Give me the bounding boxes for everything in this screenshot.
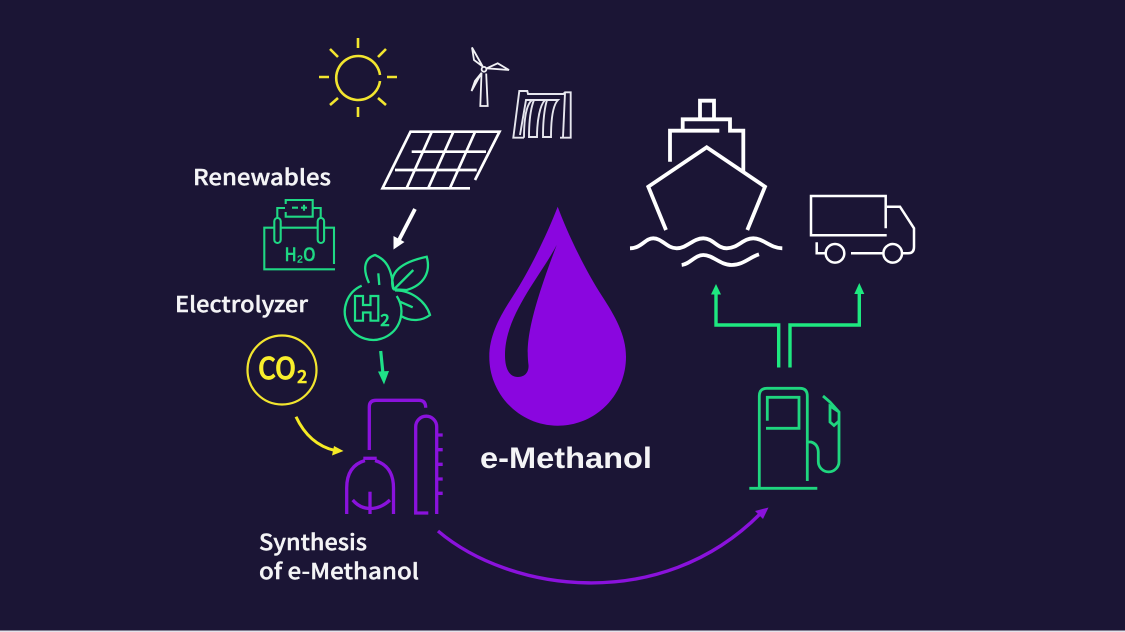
label: Synthesis of e-Methanol: Synthesis: [259, 526, 367, 557]
icon: synthesis reactor: [347, 400, 443, 514]
arrow: synthesis to fuel pump: [438, 508, 768, 583]
icon: hydro dam: [513, 91, 571, 138]
arrows: fuel to ship and truck: [711, 283, 864, 368]
label: e-Methanol: e-Methanol: [480, 442, 652, 475]
label: Synthesis of e-Methanol: [259, 526, 419, 586]
electrolyzer H2O text: H₂O: [284, 241, 316, 267]
H2 symbol: 2: [380, 306, 390, 331]
label: Electrolyzer: Electrolyzer: [175, 288, 308, 319]
icon: sun: [319, 38, 397, 117]
label: Synthesis of e-Methanol: of e-Methanol: [259, 555, 419, 586]
arrow: hydrogen to synthesis: [378, 351, 389, 384]
icon: fuel pump: [749, 388, 839, 488]
icon: e-Methanol droplet: [489, 207, 626, 426]
icon: CO2 circle: CO: [258, 344, 296, 388]
icon: wind turbine: [472, 48, 509, 106]
icon: truck: [811, 196, 914, 263]
arrow: CO2 to synthesis: [296, 417, 344, 456]
icon: CO2 circle: [248, 336, 316, 404]
icon: green hydrogen with leaves: [345, 255, 430, 340]
icon: solar panel: [382, 132, 500, 188]
arrow: renewables to hydrogen: [394, 209, 415, 250]
icon: ship: [630, 101, 782, 265]
icon: electrolyzer: [264, 200, 335, 269]
icon: CO2 circle: 2: [297, 363, 307, 389]
label: Renewables: Renewables: [193, 161, 331, 192]
